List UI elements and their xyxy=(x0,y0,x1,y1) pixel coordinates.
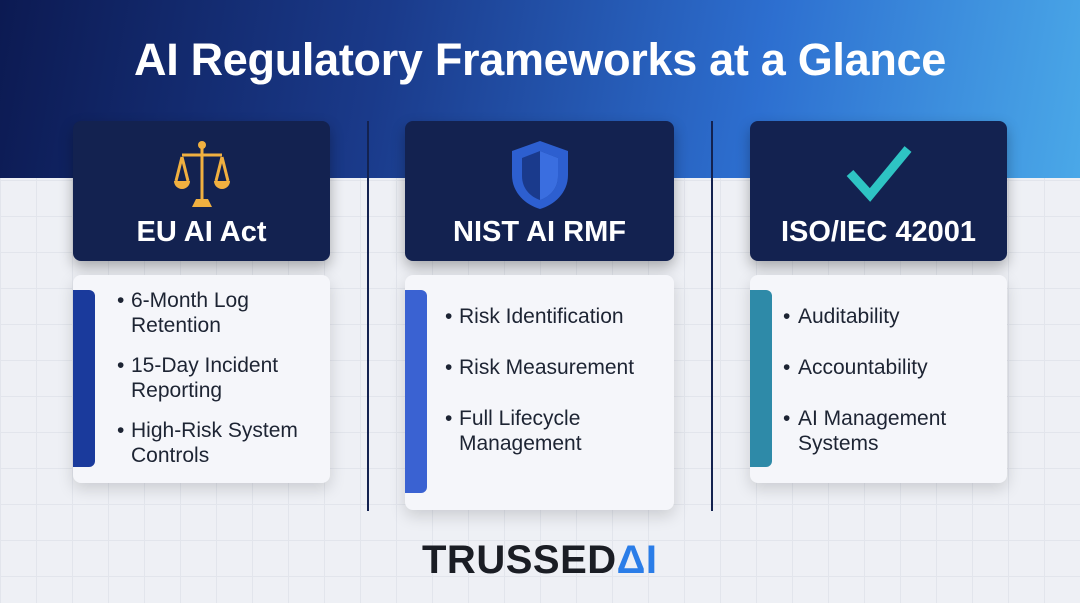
panel: EU AI Act items: Reporting xyxy=(131,379,222,402)
panel header: ISO/IEC 42001 xyxy=(750,121,1007,261)
panel: NIST items: Full Lifecycle xyxy=(459,407,580,430)
logo: TRUSSEDΔI xyxy=(422,538,658,582)
panel header: ISO/IEC 42001: ISO/IEC 42001 xyxy=(781,216,976,248)
icon: shield xyxy=(512,141,568,209)
panel: NIST items: Risk Measurement xyxy=(459,356,634,379)
panel: EU AI Act items: High-Risk System xyxy=(131,419,298,442)
icon: checkmark xyxy=(846,146,912,202)
panel: EU AI Act items: 6-Month Log xyxy=(131,289,249,312)
panel: EU AI Act items: 15-Day Incident xyxy=(131,354,278,377)
panel: EU AI Act items xyxy=(73,275,330,483)
panel header: NIST AI RMF xyxy=(405,121,674,261)
panel: NIST items: Management xyxy=(459,432,582,455)
panel: ISO items: AI Management xyxy=(798,407,946,430)
panel header: NIST AI RMF: NIST AI RMF xyxy=(453,216,626,248)
panel: EU AI Act items: Retention xyxy=(131,314,221,337)
icon: scales xyxy=(174,141,230,207)
panel: ISO items xyxy=(750,275,1007,483)
panel: EU AI Act items: Controls xyxy=(131,444,209,467)
panel: NIST items xyxy=(405,275,674,510)
panel: ISO items: Accountability xyxy=(798,356,928,379)
panel header: EU AI Act: EU AI Act xyxy=(136,216,266,248)
panel: ISO items: Systems xyxy=(798,432,879,455)
panel header: EU AI Act xyxy=(73,121,330,261)
panel: ISO items: Auditability xyxy=(798,305,900,328)
panel: NIST items: Risk Identification xyxy=(459,305,624,328)
title: AI Regulatory Frameworks at a Glance xyxy=(134,34,946,85)
